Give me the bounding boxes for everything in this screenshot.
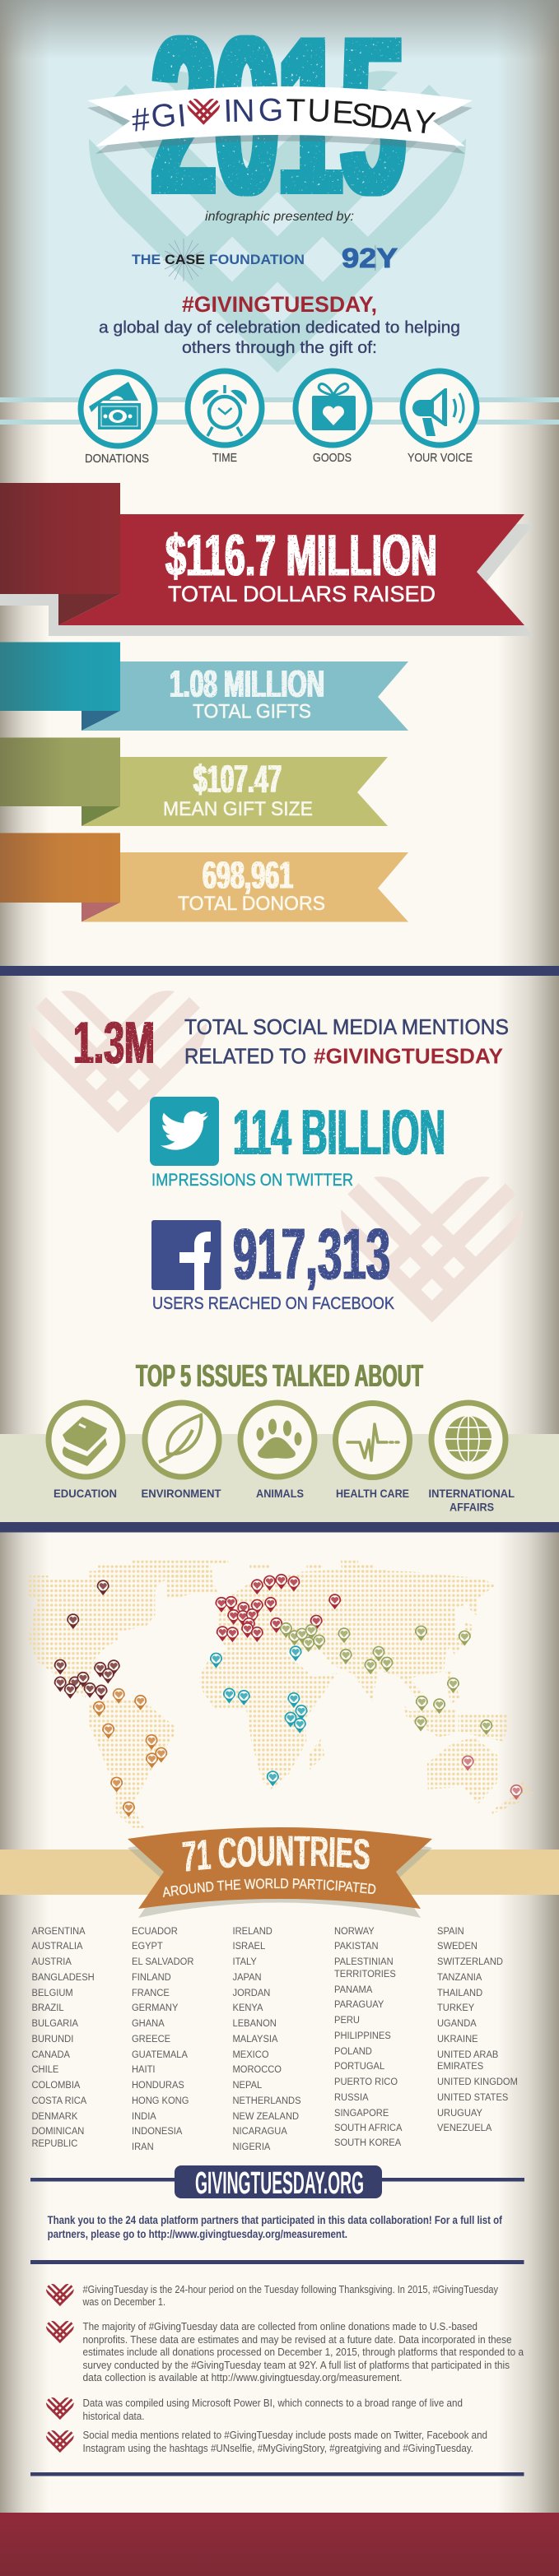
issue labels: ENVIRONMENT xyxy=(142,1487,221,1500)
country list column 1: BANGLADESH xyxy=(31,1973,95,1983)
pins: north america xyxy=(54,1580,120,1700)
country list column 3: MOROCCO xyxy=(232,2065,282,2075)
ribbon: mean gift size xyxy=(0,737,388,826)
country list column 3: MALAYSIA xyxy=(232,2035,278,2045)
social mentions text: RELATED TO xyxy=(184,1043,306,1068)
note 4 xyxy=(46,2429,487,2454)
caption: MEAN GIFT SIZE xyxy=(163,798,313,820)
country list column 1: COSTA RICA xyxy=(31,2096,86,2106)
country list column 2: EGYPT xyxy=(132,1942,163,1952)
issue labels: HEALTH CARE xyxy=(336,1487,409,1500)
heading xyxy=(182,1836,370,1871)
country list column 2: IRAN xyxy=(132,2142,154,2152)
country list column 5: UGANDA xyxy=(437,2019,477,2029)
world map xyxy=(29,1561,533,1828)
country list column 4: POLAND xyxy=(334,2047,372,2057)
country list column 1: AUSTRIA xyxy=(31,1957,72,1967)
footer band xyxy=(0,2513,559,2576)
intro text xyxy=(99,318,460,357)
social background hearts xyxy=(29,991,523,1322)
ribbon: total donors xyxy=(0,833,408,921)
country list column 4: SINGAPORE xyxy=(334,2109,389,2119)
country list column 1 xyxy=(31,1927,95,2149)
country list column 2: FINLAND xyxy=(132,1973,171,1983)
website badge xyxy=(30,2165,524,2201)
icon: clock xyxy=(188,371,262,445)
country list column 1: BELGIUM xyxy=(31,1989,73,1998)
icon labels: DONATIONS xyxy=(85,452,149,466)
large background heart xyxy=(89,71,466,373)
country list column 5: SWEDEN xyxy=(437,1942,477,1952)
country list column 1: BURUNDI xyxy=(31,2035,73,2045)
note 2: survey conducted by the #GivingTuesday team at 92Y. A full list of platforms that participated in this xyxy=(82,2359,510,2371)
country list column 5: URUGUAY xyxy=(437,2109,482,2119)
country list column 4: PAKISTAN xyxy=(334,1942,378,1952)
country list column 3: KENYA xyxy=(232,2003,263,2013)
issue labels: AFFAIRS xyxy=(450,1501,494,1514)
note 2: nonprofits. These data are estimates and may be revised at a future date. Data incorporated in these xyxy=(82,2333,512,2346)
country list column 2: INDONESIA xyxy=(132,2127,183,2137)
country list column 5: THAILAND xyxy=(437,1989,482,1998)
intro text: a global day of celebration dedicated to helping xyxy=(99,318,460,337)
country list column 1: BULGARIA xyxy=(31,2019,78,2029)
note 1: was on December 1. xyxy=(82,2295,165,2308)
thank you text xyxy=(48,2214,502,2240)
divider bar xyxy=(0,966,559,976)
stat: 917,313: 917,313 xyxy=(233,1213,390,1295)
pins: oceania xyxy=(462,1756,523,1800)
country list column 1: ARGENTINA xyxy=(31,1927,86,1937)
icon: environment xyxy=(145,1403,219,1477)
country list column 5: UNITED KINGDOM xyxy=(437,2077,518,2087)
caption: TOTAL DOLLARS RAISED xyxy=(168,582,436,606)
country list column 1: DENMARK xyxy=(31,2112,78,2122)
country list column 5: SPAIN xyxy=(437,1927,464,1937)
title text TUESDAY: TUESDAY xyxy=(286,93,437,142)
country list column 2: ECUADOR xyxy=(132,1927,178,1937)
ribbon: total gifts xyxy=(0,642,408,731)
caption: TOTAL DONORS xyxy=(178,893,325,915)
country list column 5: SWITZERLAND xyxy=(437,1957,503,1967)
icon: animals xyxy=(240,1403,314,1477)
country list column 1: BRAZIL xyxy=(31,2003,64,2013)
country list column 3: IRELAND xyxy=(232,1927,273,1937)
note 3 xyxy=(46,2397,463,2422)
country list column 5: UKRAINE xyxy=(437,2035,478,2045)
country list column 5: UNITED STATES xyxy=(437,2093,509,2103)
country list column 3 xyxy=(232,1927,301,2152)
icon: twitter xyxy=(150,1097,219,1166)
country list column 4: SOUTH KOREA xyxy=(334,2138,401,2148)
country list column 2: GUATEMALA xyxy=(132,2050,188,2060)
subheading: AROUND THE WORLD PARTICIPATED xyxy=(163,1878,375,1897)
country list column 2: INDIA xyxy=(132,2112,156,2122)
country list column 3: NETHERLANDS xyxy=(232,2096,301,2106)
value: 1.08 MILLION xyxy=(170,662,324,705)
icon: education xyxy=(49,1403,123,1477)
note 2: The majority of #GivingTuesday data are collected from online donations made to U.S.-based xyxy=(82,2320,477,2332)
country list column 4: PARAGUAY xyxy=(334,2000,384,2010)
country list column 4: PANAMA xyxy=(334,1985,373,1995)
note 1: #GivingTuesday is the 24-hour period on the Tuesday following Thanksgiving. In 2015, #GivingTuesday xyxy=(82,2283,498,2295)
banner: 71 countries xyxy=(128,1827,432,1918)
country list column 2: GHANA xyxy=(132,2019,165,2029)
country list column 3: MEXICO xyxy=(232,2050,269,2060)
thank you text: partners, please go to http://www.givingtuesday.org/measurement. xyxy=(48,2228,347,2240)
caption: twitter: IMPRESSIONS ON TWITTER xyxy=(151,1171,353,1190)
social mentions text xyxy=(184,1014,509,1068)
pins: africa xyxy=(210,1645,307,1786)
caption: TOTAL GIFTS xyxy=(193,701,311,722)
country list column 4: PUERTO RICO xyxy=(334,2077,398,2087)
note 3: Data was compiled using Microsoft Power BI, which connects to a broad range of live and xyxy=(82,2397,463,2409)
country list column 2: EL SALVADOR xyxy=(132,1957,193,1967)
heart logo in title xyxy=(188,99,220,125)
country list column 1: CHILE xyxy=(31,2065,59,2075)
country list column 3: NIGERIA xyxy=(232,2142,271,2152)
pins: europe xyxy=(215,1574,341,1642)
heading: 71 COUNTRIES xyxy=(182,1836,370,1871)
icon labels: YOUR VOICE xyxy=(408,451,473,465)
country list column 2: HONG KONG xyxy=(132,2096,189,2106)
country list column 3: ISRAEL xyxy=(232,1942,266,1952)
ribbon: total dollars raised xyxy=(0,483,533,636)
country list column 1: AUSTRALIA xyxy=(31,1942,83,1952)
icon: health care xyxy=(336,1404,410,1478)
icon labels xyxy=(85,451,473,466)
icon labels: TIME xyxy=(212,451,237,465)
intro text: others through the gift of: xyxy=(182,338,377,357)
caption: facebook: USERS REACHED ON FACEBOOK xyxy=(152,1294,394,1313)
country list column 5: VENEZUELA xyxy=(437,2123,492,2133)
pins: south america xyxy=(93,1688,167,1817)
note 3: historical data. xyxy=(82,2410,145,2422)
note 2: data collection is available at http://www.givingtuesday.org/measurement. xyxy=(82,2371,402,2383)
note 2: estimates include all donations processed on December 1, 2015, through platforms that responded to a xyxy=(82,2346,524,2358)
country list column 2: GREECE xyxy=(132,2035,170,2045)
country list column 4: NORWAY xyxy=(334,1927,375,1937)
country list column 2: HONDURAS xyxy=(132,2081,184,2091)
country list column 2: FRANCE xyxy=(132,1989,170,1998)
country list column 3: NEW ZEALAND xyxy=(232,2112,299,2122)
country list column 5: TANZANIA xyxy=(437,1973,482,1983)
logo: The Case Foundation xyxy=(132,239,305,281)
country list column 4: RUSSIA xyxy=(334,2093,369,2103)
icon: international affairs xyxy=(431,1403,505,1477)
value: 698,961 xyxy=(203,854,293,897)
country list column 4: PHILIPPINES xyxy=(334,2031,391,2041)
value: $107.47 xyxy=(193,757,282,801)
issue labels: ANIMALS xyxy=(256,1487,304,1500)
country list column 3: JORDAN xyxy=(232,1989,270,1998)
country list column 4: SOUTH AFRICA xyxy=(334,2123,403,2133)
icon labels: GOODS xyxy=(313,451,352,465)
icon: gift xyxy=(296,371,370,445)
title banner xyxy=(87,86,473,154)
country list column 1: CANADA xyxy=(31,2050,70,2060)
country list column 4: TERRITORIES xyxy=(334,1970,396,1980)
pins: asia xyxy=(280,1622,492,1735)
logo: 92Y: 92Y xyxy=(342,243,398,273)
note 2 xyxy=(46,2320,524,2383)
country list column 2 xyxy=(132,1927,193,2152)
issue labels: EDUCATION xyxy=(54,1487,117,1500)
country list column 3: LEBANON xyxy=(232,2019,277,2029)
country list column 3: JAPAN xyxy=(232,1973,262,1983)
country list column 3: NICARAGUA xyxy=(232,2127,287,2137)
country list column 5: UNITED ARAB xyxy=(437,2050,499,2060)
country list column 3: NEPAL xyxy=(232,2081,263,2091)
title text: #GIING xyxy=(129,92,283,139)
divider bar xyxy=(0,1522,559,1532)
logo: The Case Foundation: THE CASE FOUNDATION xyxy=(132,253,305,267)
website badge: GIVINGTUESDAY.ORG xyxy=(195,2166,364,2201)
country list column 4 xyxy=(334,1927,403,2148)
country list column 3: ITALY xyxy=(232,1957,257,1967)
social mentions text: TOTAL SOCIAL MEDIA MENTIONS xyxy=(184,1014,509,1039)
note 4: Instagram using the hashtags #UNselfie, #MyGivingStory, #greatgiving and #GivingTuesday. xyxy=(82,2442,473,2454)
stat: 1.3M: 1.3M xyxy=(73,1010,155,1076)
country list column 1: COLOMBIA xyxy=(31,2081,81,2091)
country list column 2: GERMANY xyxy=(132,2003,179,2013)
country list column 2: HAITI xyxy=(132,2065,156,2075)
icon: facebook xyxy=(151,1220,221,1290)
icon: donations xyxy=(81,372,155,446)
country list column 1: DOMINICAN xyxy=(31,2127,84,2137)
intro heading: #GIVINGTUESDAY, xyxy=(182,292,377,317)
country list column 4: PALESTINIAN xyxy=(334,1957,394,1967)
issue labels xyxy=(54,1487,515,1514)
country list column 5 xyxy=(437,1927,518,2133)
social mentions text: #GIVINGTUESDAY xyxy=(314,1043,503,1068)
country list column 5: EMIRATES xyxy=(437,2062,483,2072)
country list column 5: TURKEY xyxy=(437,2003,474,2013)
presented by: infographic presented by: xyxy=(205,210,354,224)
note 4: Social media mentions related to #GivingTuesday include posts made on Twitter, Facebook and xyxy=(82,2429,487,2441)
icon: megaphone xyxy=(403,371,477,445)
country list column 4: PERU xyxy=(334,2016,360,2026)
country list column 1: REPUBLIC xyxy=(31,2139,77,2149)
country list column 4: PORTUGAL xyxy=(334,2062,385,2072)
issue labels: INTERNATIONAL xyxy=(428,1487,515,1500)
note 1 xyxy=(46,2283,498,2308)
